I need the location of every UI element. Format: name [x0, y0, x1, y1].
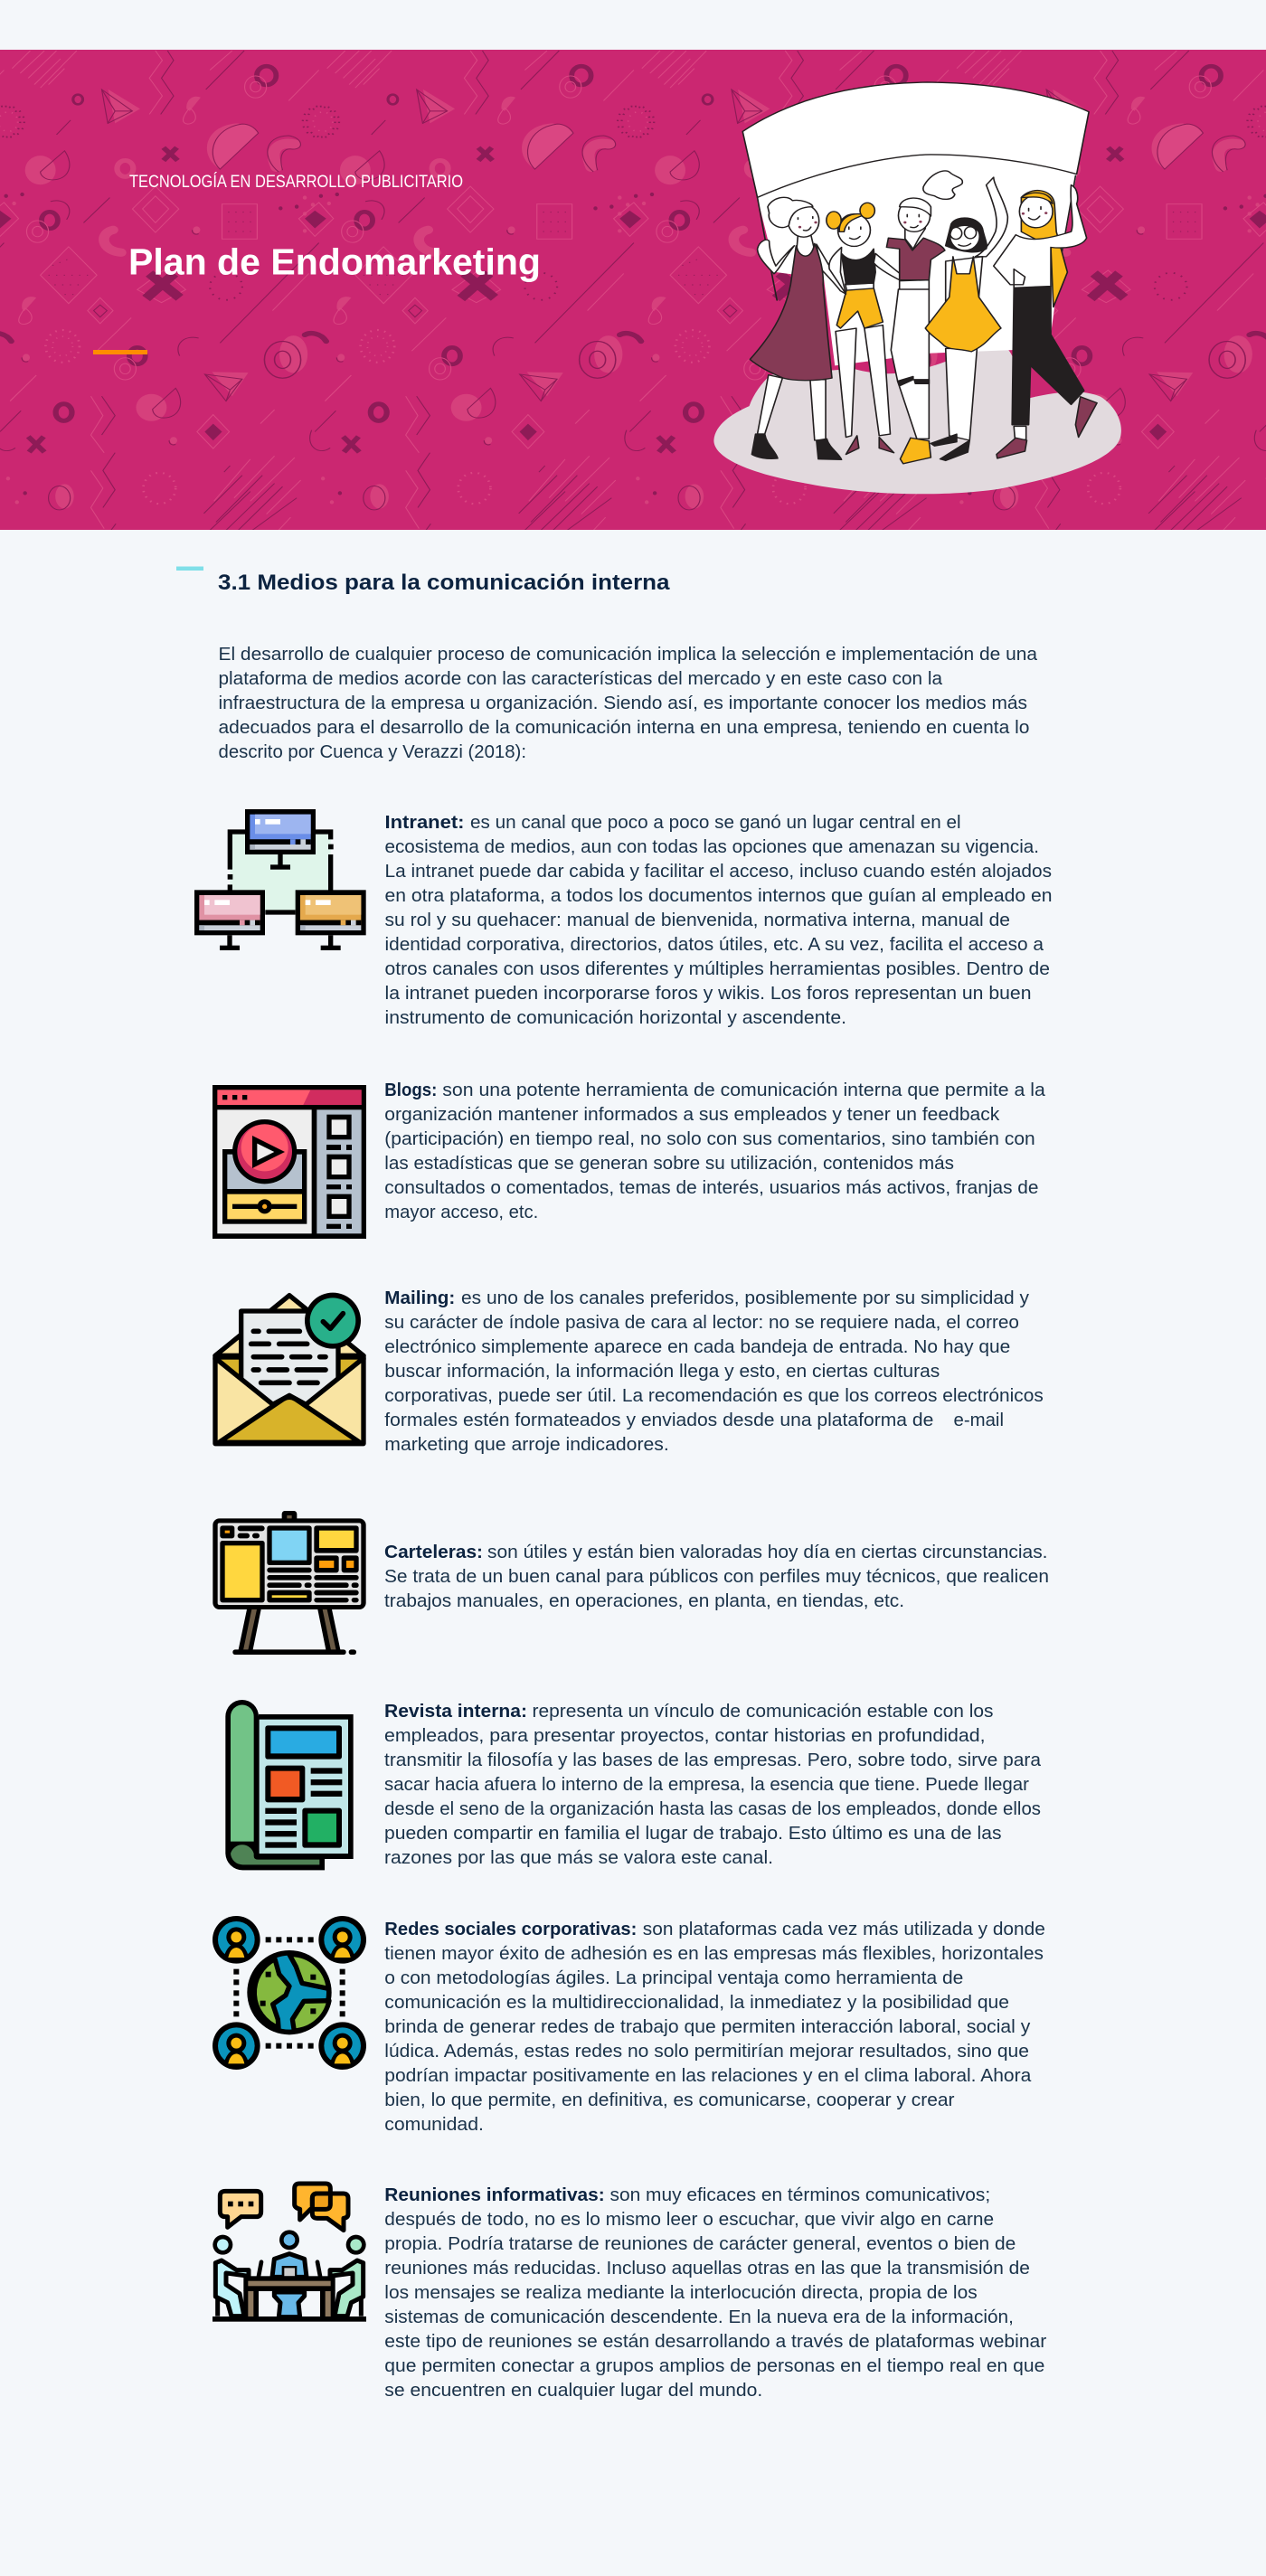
- grey floor blob: [713, 343, 1121, 494]
- text: redes sociales corporativas: comunidad.: [384, 2114, 484, 2135]
- text: blogs: son una potente herramienta de comunicación interna que permite a la: [442, 1080, 1045, 1100]
- icon: internal magazine: [225, 1700, 354, 1870]
- text: carteleras: Se trata de un buen canal para públicos con perfiles muy técnicos, que realicen: [384, 1566, 1049, 1587]
- section heading accent bar: [176, 566, 203, 571]
- intro paragraph: [219, 644, 1038, 762]
- intro paragraph: adecuados para el desarrollo de la comunicación interna en una empresa, teniendo en cuenta lo: [219, 717, 1029, 738]
- text: revista interna: empleados, para presentar proyectos, contar historias en profundidad,: [384, 1725, 986, 1746]
- text: mailing: marketing que arroje indicadores.: [384, 1434, 669, 1455]
- banner pink background: [0, 50, 1266, 530]
- icon: corporate social network globe: [213, 1916, 366, 2070]
- orange accent bar: [93, 350, 147, 354]
- text: reuniones informativas: después de todo, no es lo mismo leer o escuchar, que vivir algo en carne: [384, 2209, 994, 2230]
- text: intranet: ecosistema de medios, aun con todas las opciones que amenazan su vigencia.: [385, 836, 1039, 857]
- person 2: black top and yellow shorts: [827, 203, 909, 454]
- text: revista interna: transmitir la filosofía y las bases de las empresas. Pero, sobre todo, sirve para: [384, 1750, 1042, 1770]
- text: reuniones informativas: sistemas de comunicación descendente. En la nueva era de la información,: [384, 2307, 1014, 2327]
- text: carteleras: Carteleras:: [384, 1542, 483, 1562]
- intro paragraph: infraestructura de la empresa u organización. Siendo así, es importante conocer los medios más: [219, 693, 1027, 713]
- text: intranet: la intranet pueden incorporarse foros y wikis. Los foros representan un buen: [385, 983, 1031, 1004]
- text: blogs: (participación) en tiempo real, no solo con sus comentarios, sino también con: [384, 1128, 1035, 1149]
- text: mailing: su carácter de índole pasiva de cara al lector: no se requiere nada, el correo: [384, 1312, 1019, 1333]
- icon: blog video window: [213, 1085, 366, 1239]
- header banner: [0, 50, 1266, 530]
- person 1: maroon dress: [750, 197, 846, 459]
- text: mailing: es uno de los canales preferidos, posiblemente por su simplicidad y: [461, 1288, 1030, 1308]
- text: intranet: otros canales con usos diferentes y múltiples herramientas posibles. Dentro de: [385, 958, 1050, 979]
- text: reuniones informativas: los mensajes se realiza mediante la interlocución directa, propia de los: [384, 2282, 978, 2303]
- intro paragraph: descrito por Cuenca y Verazzi (2018):: [219, 741, 526, 762]
- text: revista interna: desde el seno de la organización hasta las casas de los empleados, donde ellos: [384, 1798, 1041, 1819]
- intro paragraph: plataforma de medios acorde con las características del mercado y en este caso con la: [219, 668, 943, 689]
- text: intranet: es un canal que poco a poco se ganó un lugar central en el: [470, 812, 961, 833]
- text: mailing: buscar información, la información llega y esto, en ciertas culturas: [384, 1361, 940, 1382]
- text: mailing: electrónico simplemente aparece en cada bandeja de entrada. No hay que: [384, 1336, 1010, 1357]
- text: reuniones informativas: [384, 2184, 1046, 2401]
- text: blogs: consultados o comentados, temas de interés, usuarios más activos, franjas de: [384, 1177, 1038, 1198]
- text: redes sociales corporativas: [384, 1919, 1045, 2135]
- text: intranet: identidad corporativa, directorios, datos útiles, etc. A su vez, facilita el acceso a: [385, 934, 1044, 955]
- text: blogs: las estadísticas que se generan sobre su utilización, contenidos más: [384, 1153, 954, 1174]
- title: Plan de Endomarketing: [128, 241, 541, 282]
- person 3: maroon shirt: [886, 171, 962, 464]
- text: reuniones informativas: propia. Podría tratarse de reuniones de carácter general, eventos o bien de: [384, 2233, 1016, 2254]
- icon: bulletin board: [213, 1511, 366, 1655]
- text: redes sociales corporativas: brinda de generar redes de trabajo que permiten interacción laboral, social y: [384, 2016, 1031, 2037]
- icon: team meeting: [213, 2184, 366, 2322]
- text: intranet: instrumento de comunicación horizontal y ascendente.: [385, 1007, 846, 1028]
- text: reuniones informativas: se encuentren en cualquier lugar del mundo.: [384, 2380, 762, 2401]
- text: reuniones informativas: este tipo de reuniones se están desarrollando a través de plataformas webinar: [384, 2331, 1046, 2352]
- icon: intranet network of monitors: [194, 809, 366, 950]
- text: redes sociales corporativas: o con metodologías ágiles. La principal ventaja como herramienta de: [384, 1967, 963, 1988]
- text: reuniones informativas: reuniones más reducidas. Incluso aquellas otras en las que la transmisión de: [384, 2258, 1030, 2279]
- text: intranet: La intranet puede dar cabida y facilitar el acceso, incluso cuando estén alojados: [385, 861, 1052, 882]
- section heading: 3.1 Medios para la comunicación interna: [218, 571, 670, 595]
- subtitle: TECNOLOGÍA EN DESARROLLO PUBLICITARIO: [129, 171, 463, 192]
- text: carteleras: [384, 1542, 1049, 1611]
- text: mailing: e-mail: [953, 1410, 1004, 1430]
- text: revista interna: representa un vínculo de comunicación estable con los: [532, 1701, 993, 1722]
- intro paragraph: El desarrollo de cualquier proceso de comunicación implica la selección e implementación de una: [219, 644, 1038, 665]
- text: redes sociales corporativas: tienen mayor éxito de adhesión es en las empresas más flexibles, horizontales: [384, 1943, 1044, 1964]
- text: intranet: su rol y su quehacer: manual de bienvenida, normativa interna, manual de: [385, 910, 1010, 930]
- text: intranet: [385, 812, 1053, 1028]
- text: carteleras: trabajos manuales, en operaciones, en planta, en tiendas, etc.: [384, 1590, 904, 1611]
- text: revista interna: sacar hacia afuera lo interno de la empresa, la esencia que tiene. Puede llegar: [384, 1774, 1029, 1795]
- text: intranet: Intranet:: [385, 812, 465, 833]
- text: mailing: corporativas, puede ser útil. La recomendación es que los correos electrónicos: [384, 1385, 1044, 1406]
- text: redes sociales corporativas: lúdica. Además, estas redes no solo permitirían mejorar resultados, sino que: [384, 2041, 1029, 2062]
- text: carteleras: son útiles y están bien valoradas hoy día en ciertas circunstancias.: [487, 1542, 1047, 1562]
- text: mailing: Mailing:: [384, 1288, 455, 1308]
- text: revista interna: [384, 1701, 1042, 1868]
- text: blogs: Blogs:: [384, 1080, 437, 1100]
- text: redes sociales corporativas: podrían impactar positivamente en las relaciones y en el clima laboral. Ahora: [384, 2065, 1032, 2086]
- white sign: [742, 82, 1089, 365]
- text: blogs: [384, 1080, 1045, 1222]
- text: redes sociales corporativas: son plataformas cada vez más utilizada y donde: [643, 1919, 1045, 1939]
- text: redes sociales corporativas: comunicación es la multidireccionalidad, la inmediatez y la posibilidad que: [384, 1992, 1009, 2013]
- text: redes sociales corporativas: Redes sociales corporativas:: [384, 1919, 637, 1939]
- text: revista interna: Revista interna:: [384, 1701, 527, 1722]
- person 5: white shirt and black trousers: [994, 185, 1097, 458]
- text: blogs: organización mantener informados a sus empleados y tener un feedback: [384, 1104, 1000, 1125]
- text: mailing: formales estén formateados y enviados desde una plataforma de: [384, 1410, 933, 1430]
- text: reuniones informativas: Reuniones informativas:: [384, 2184, 605, 2205]
- text: intranet: en otra plataforma, a todos los documentos internos que guían al empleado en: [385, 885, 1053, 906]
- text: mailing: [384, 1288, 1044, 1455]
- text: revista interna: pueden compartir en familia el lugar de trabajo. Esto último es una de las: [384, 1823, 1002, 1844]
- text: blogs: mayor acceso, etc.: [384, 1202, 538, 1222]
- icon: mailing open envelope: [213, 1293, 366, 1444]
- text: revista interna: razones por las que más se valora este canal.: [384, 1847, 773, 1868]
- banner geometric pattern: [0, 51, 1266, 530]
- person 4: yellow dress: [925, 177, 1007, 460]
- text: redes sociales corporativas: bien, lo que permite, en definitiva, es comunicarse, cooperar y crear: [384, 2090, 955, 2110]
- text: reuniones informativas: son muy eficaces en términos comunicativos;: [609, 2184, 990, 2205]
- text: reuniones informativas: que permiten conectar a grupos amplios de personas en el tiempo real en que: [384, 2355, 1044, 2376]
- illustration: group holding a banner: [713, 82, 1121, 494]
